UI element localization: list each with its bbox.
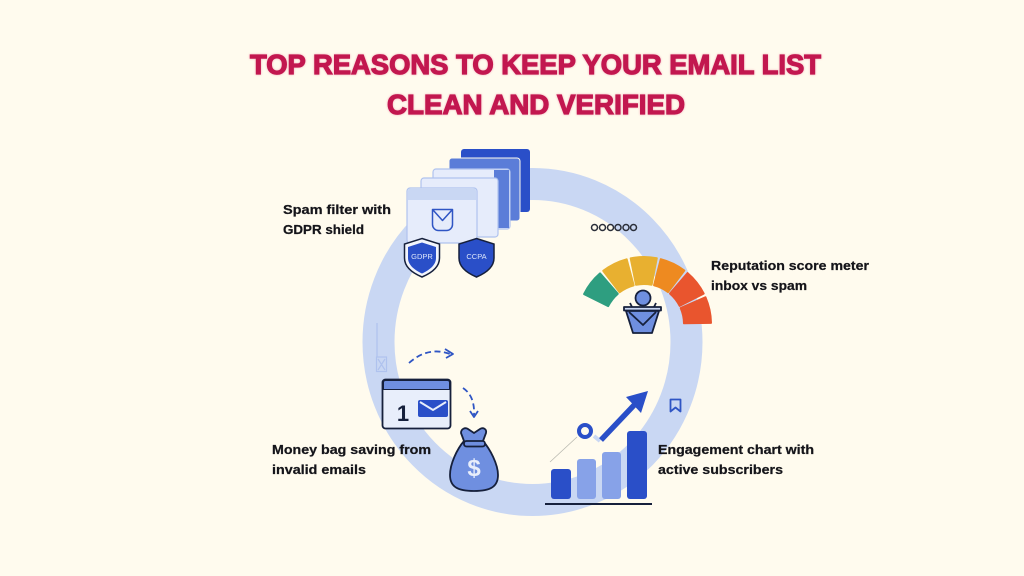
label: money bag: Money bag saving from [272, 442, 431, 457]
label: money bag: invalid emails [272, 462, 366, 477]
label: reputation meter: inbox vs spam [711, 278, 807, 293]
icon: dashed arrow to money bag [463, 388, 478, 417]
icon: bookmark [670, 400, 680, 412]
label: engagement chart: Engagement chart with [658, 442, 814, 457]
chart: engagement bars [545, 431, 652, 505]
label: spam filter [283, 202, 391, 237]
label: engagement chart [658, 442, 814, 477]
icon: row of small dots [592, 224, 636, 230]
title [250, 49, 821, 120]
icon: faint key mark [376, 323, 386, 372]
icon: GDPR shield: GDPR [411, 252, 433, 261]
icon: CCPA shield: CCPA [466, 252, 487, 261]
title: TOP REASONS TO KEEP YOUR EMAIL LIST [250, 49, 821, 80]
label: engagement chart: active subscribers [658, 462, 783, 477]
arrow: rising trend [550, 391, 648, 462]
icon: envelope [432, 210, 452, 230]
icon: dashed arrow to calendar top [409, 349, 453, 363]
ring [378, 184, 686, 500]
label: spam filter: GDPR shield [283, 222, 364, 237]
icon: money bag [450, 428, 498, 491]
icon: money bag: $ [467, 455, 481, 482]
icon: calendar with envelope: 1 [397, 401, 409, 426]
icon: calendar with envelope [382, 380, 450, 428]
label: reputation meter: Reputation score meter [711, 258, 869, 273]
label: spam filter: Spam filter with [283, 202, 391, 217]
label: reputation meter [711, 258, 869, 293]
icon: person with inbox basket [624, 290, 661, 333]
label: money bag [272, 442, 431, 477]
gauge: reputation score meter [581, 253, 711, 323]
icon: spam filter cards with shields [404, 149, 530, 277]
title: CLEAN AND VERIFIED [387, 89, 685, 120]
